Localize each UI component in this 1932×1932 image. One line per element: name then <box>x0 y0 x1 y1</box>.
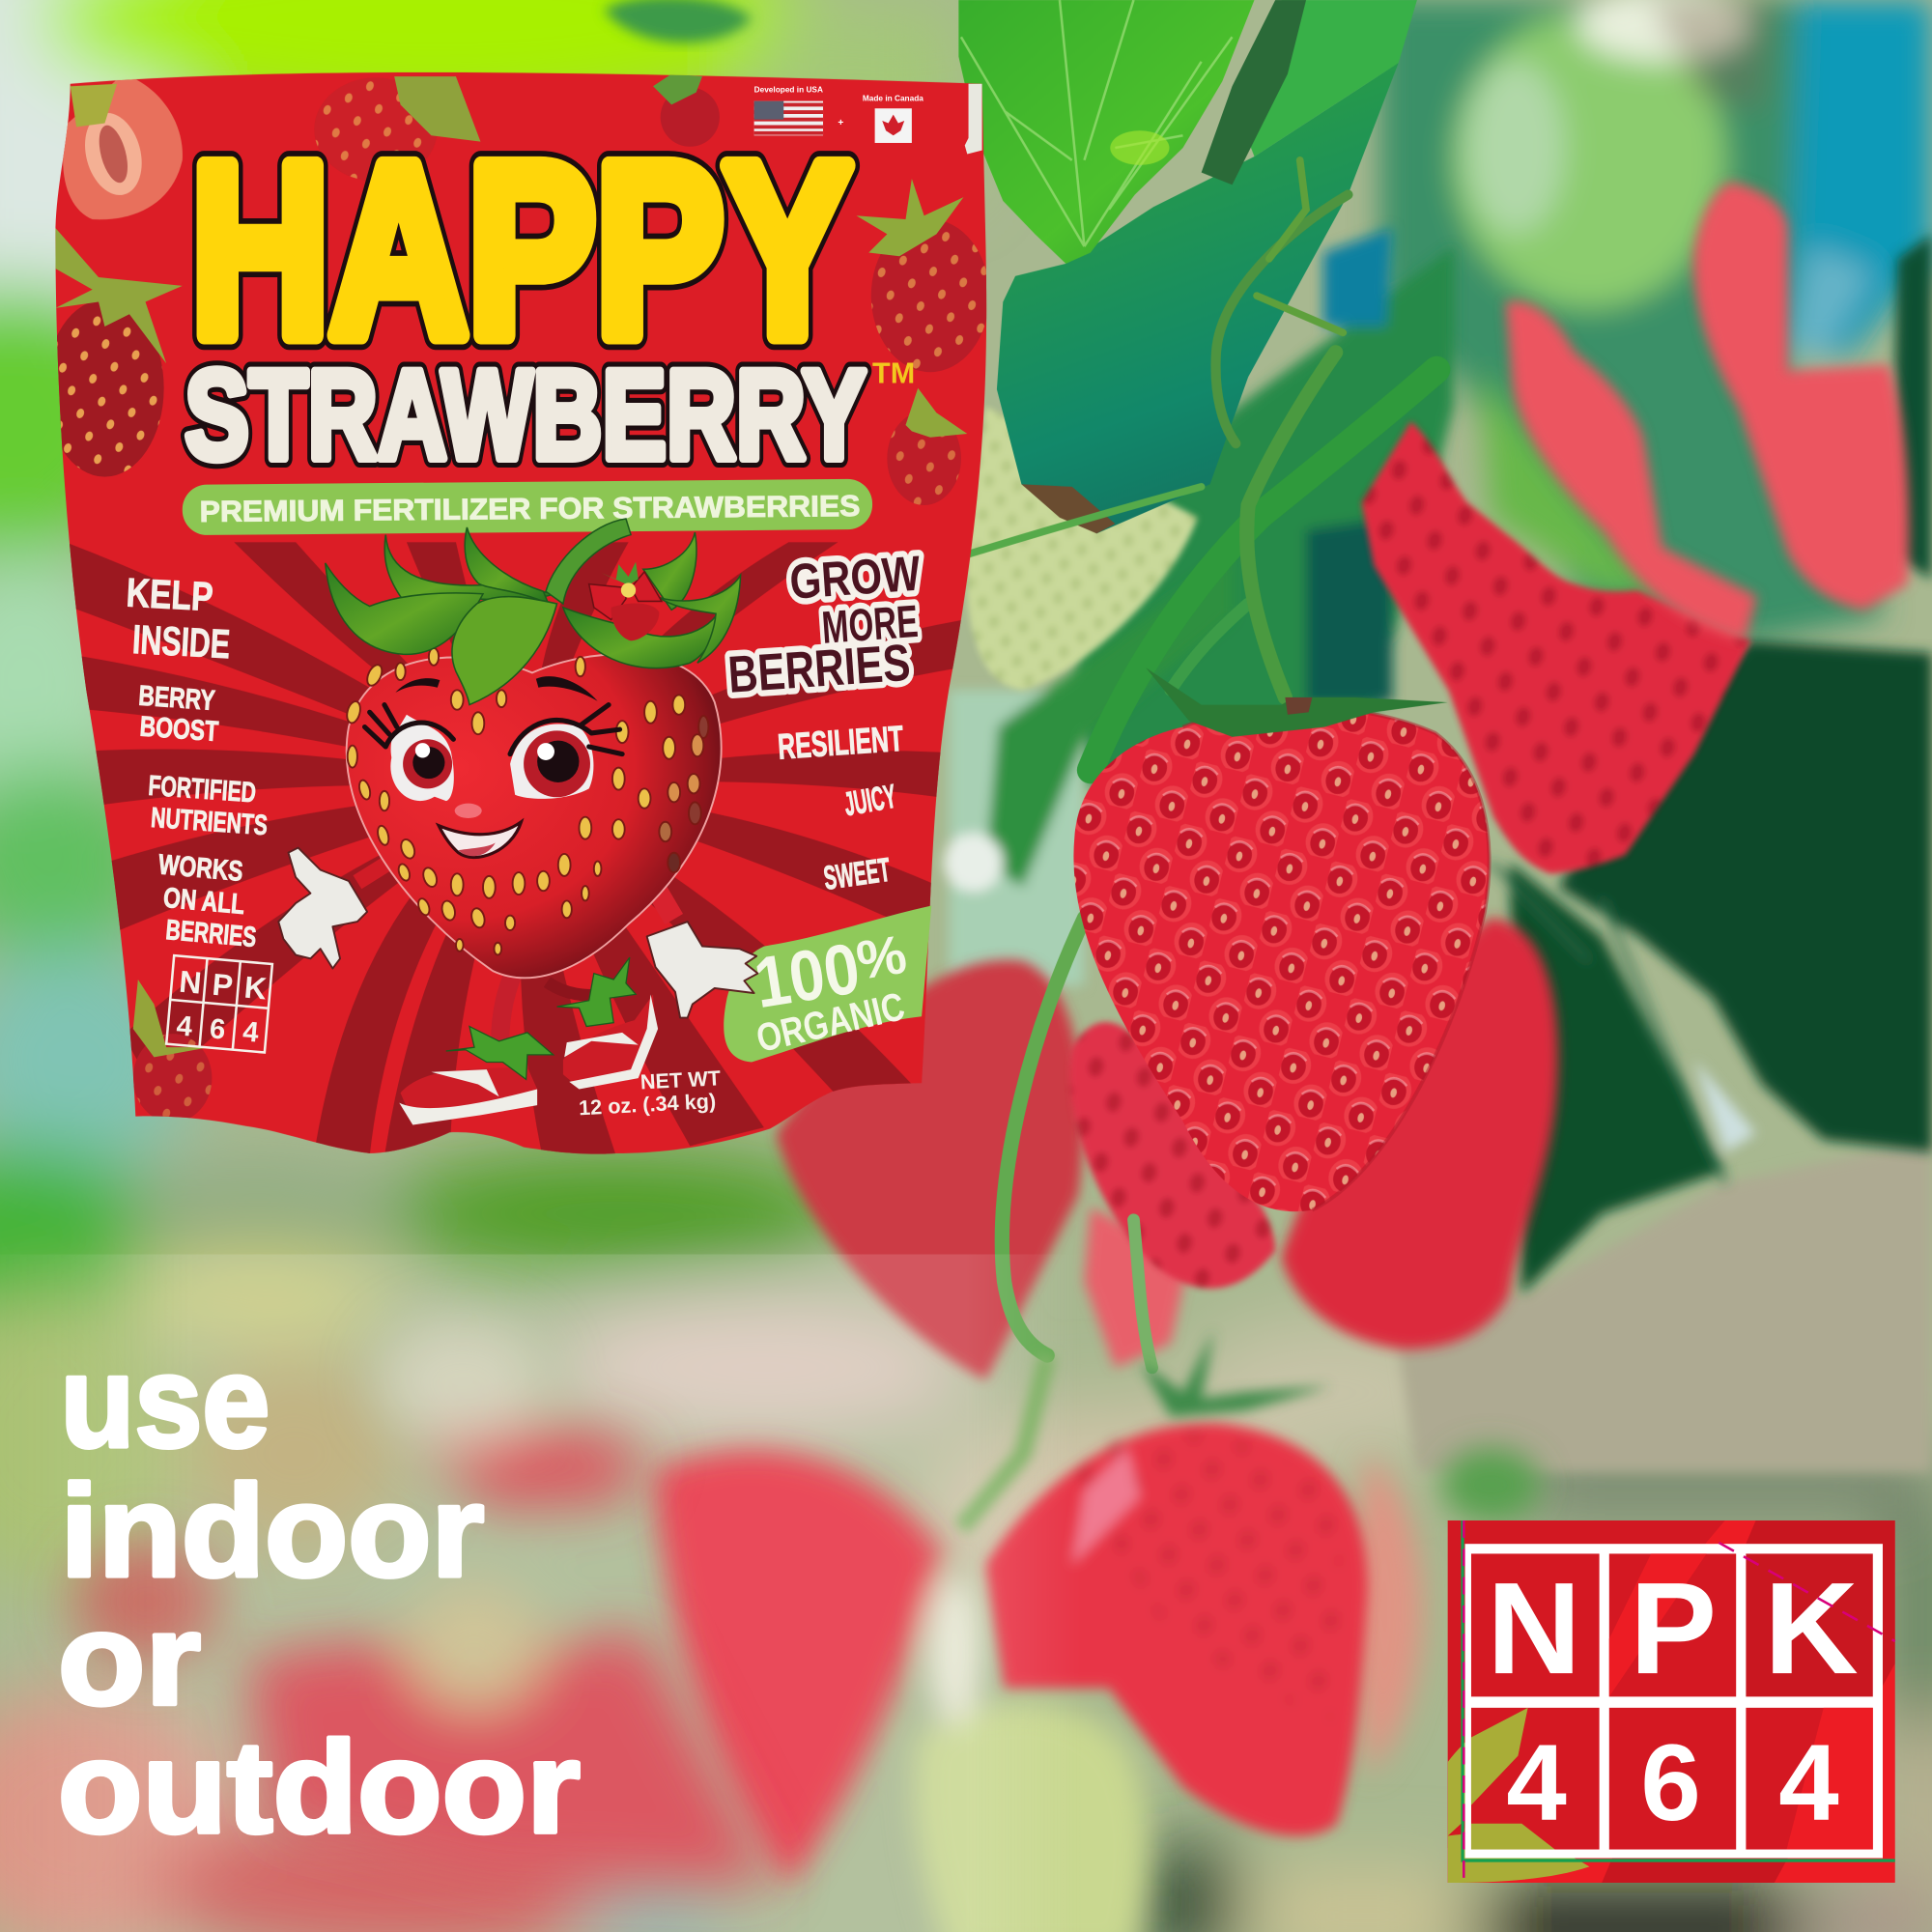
pouch body <box>55 72 986 1154</box>
NPK table: 4 <box>1506 1721 1567 1843</box>
leaf: bright green top <box>958 0 1254 264</box>
flags: Made in Canada <box>863 94 923 103</box>
NPK table: P <box>1630 1555 1717 1701</box>
mascot mouth and nose <box>439 804 522 858</box>
left claims: KELP <box>126 571 214 620</box>
unripe strawberry <box>967 407 1198 690</box>
net weight: 12 oz. (.34 kg) <box>578 1089 717 1120</box>
organic badge <box>724 906 931 1062</box>
left claims <box>126 571 269 953</box>
right claims: SWEET <box>821 852 893 897</box>
beige wall behind foliage <box>1392 1140 1932 1472</box>
NPK table: 6 <box>1640 1721 1701 1843</box>
flags <box>754 84 982 154</box>
flags: + <box>838 118 843 128</box>
top blurred leaf fragment <box>604 0 752 43</box>
sunburst swirl rays <box>49 536 985 1155</box>
headline: use indoor or outdoor: or <box>58 1586 201 1732</box>
net weight: NET WT <box>639 1065 721 1094</box>
left claims: NUTRIENTS <box>150 803 269 841</box>
mascot strawberry <box>278 519 757 1125</box>
headline: use indoor or outdoor: outdoor <box>58 1715 581 1861</box>
mascot left glove <box>278 848 367 969</box>
left claims: BERRIES <box>164 915 258 953</box>
right claims <box>777 719 905 897</box>
mini NPK grid <box>166 955 272 1053</box>
headline: use indoor or outdoor: indoor <box>60 1458 484 1604</box>
soft blobs <box>653 0 1932 1932</box>
brand title: HAPPY: HAPPY <box>191 113 851 388</box>
translucent lower overlay <box>0 1254 1932 1932</box>
left claims: ON ALL <box>162 881 246 921</box>
background strawberry, upper right <box>1361 421 1750 873</box>
grow more berries: MORE <box>820 596 920 654</box>
stems and branches <box>967 160 1436 1368</box>
grow more berries: GROW <box>788 546 923 610</box>
leaf: dark green middle <box>997 0 1417 533</box>
NPK table <box>1465 1544 1883 1858</box>
left claims: BOOST <box>139 710 219 748</box>
lower blurred stems and leaves <box>961 1331 1331 1528</box>
NPK table: K <box>1764 1555 1859 1701</box>
wide blurred foreground shapes <box>74 1319 777 1886</box>
mascot shoes <box>399 957 658 1125</box>
NPK 4-6-4 badge <box>1448 1520 1895 1883</box>
brand title: STRAWBERRY: TM <box>872 357 915 390</box>
mascot leaf hat <box>326 519 741 705</box>
blurred red berries behind main fruit <box>777 918 1558 1836</box>
brand title: STRAWBERRY: STRAWBERRY <box>185 343 867 485</box>
mascot bow with berry <box>589 562 662 640</box>
mascot body <box>347 654 722 978</box>
brand title: STRAWBERRY: STRAWBERRY <box>185 343 867 485</box>
organic badge: ORGANIC <box>753 983 909 1061</box>
background pale gap and stems at left of fruit <box>944 554 1233 985</box>
left claims: FORTIFIED <box>148 771 257 809</box>
left claims: WORKS <box>157 848 244 888</box>
net weight <box>578 1065 721 1120</box>
mini NPK grid: K <box>242 970 268 1007</box>
headline: use indoor or outdoor: use <box>60 1328 270 1474</box>
NPK table: 4 <box>1778 1721 1839 1843</box>
premium fertilizer pill <box>183 479 872 535</box>
mini NPK grid: N <box>178 964 203 1001</box>
mini NPK grid: P <box>211 967 235 1003</box>
right claims: JUICY <box>841 779 898 823</box>
organic badge: % <box>852 923 911 991</box>
grow more berries: BERRIES <box>726 635 912 704</box>
headline: use indoor or outdoor <box>58 1328 581 1861</box>
mascot limbs <box>357 850 674 1050</box>
background dark leaves <box>1072 228 1932 1293</box>
mascot eyes <box>365 676 622 801</box>
mini NPK grid: 4 <box>175 1009 194 1043</box>
grow more berries <box>726 546 923 704</box>
mini NPK grid: 4 <box>242 1015 261 1049</box>
left claims: INSIDE <box>131 616 231 667</box>
mascot right glove <box>647 922 757 1018</box>
brand title: HAPPY: HAPPY <box>191 113 851 388</box>
small strawberry under main fruit <box>1069 1022 1275 1289</box>
main strawberry <box>1073 668 1490 1211</box>
right claims: RESILIENT <box>777 719 905 767</box>
decorative strawberries <box>45 74 989 1122</box>
mascot seeds <box>345 648 708 955</box>
premium fertilizer pill: PREMIUM FERTILIZER FOR STRAWBERRIES <box>200 490 860 528</box>
flags: Developed in USA <box>754 85 823 95</box>
product pouch <box>45 72 989 1155</box>
blurred strawberry petals top right <box>1506 183 1909 640</box>
mini NPK grid: 6 <box>209 1012 227 1046</box>
NPK table: N <box>1487 1555 1581 1701</box>
left claims: BERRY <box>137 679 216 717</box>
organic badge: 100 <box>749 927 865 1023</box>
